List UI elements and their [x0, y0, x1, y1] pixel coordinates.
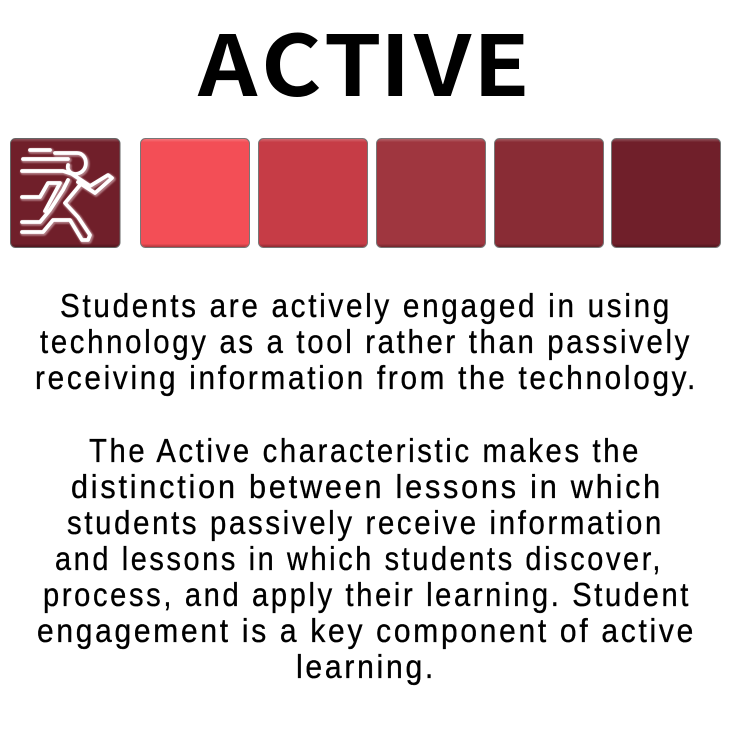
- text block: explanation: students passively receive information: [67, 504, 664, 541]
- colour tile 4: [494, 138, 604, 248]
- text block: explanation: distinction between lessons in which: [71, 468, 663, 505]
- text block: explanation: and lessons in which students discover,: [55, 540, 663, 577]
- text block: explanation: The Active characteristic makes the: [89, 432, 641, 469]
- icon: running student tile: [10, 138, 120, 248]
- colour tile 5: [612, 138, 720, 248]
- colour tile 1: [140, 138, 250, 248]
- colour tile 2: [258, 138, 368, 248]
- colour tile 3: [376, 138, 486, 248]
- text block: definition: Students are actively engaged in using: [60, 287, 672, 324]
- title: ACTIVE: [197, 0, 530, 121]
- text block: explanation: [37, 432, 696, 685]
- text block: definition: [35, 287, 698, 396]
- text block: explanation: learning.: [296, 648, 436, 685]
